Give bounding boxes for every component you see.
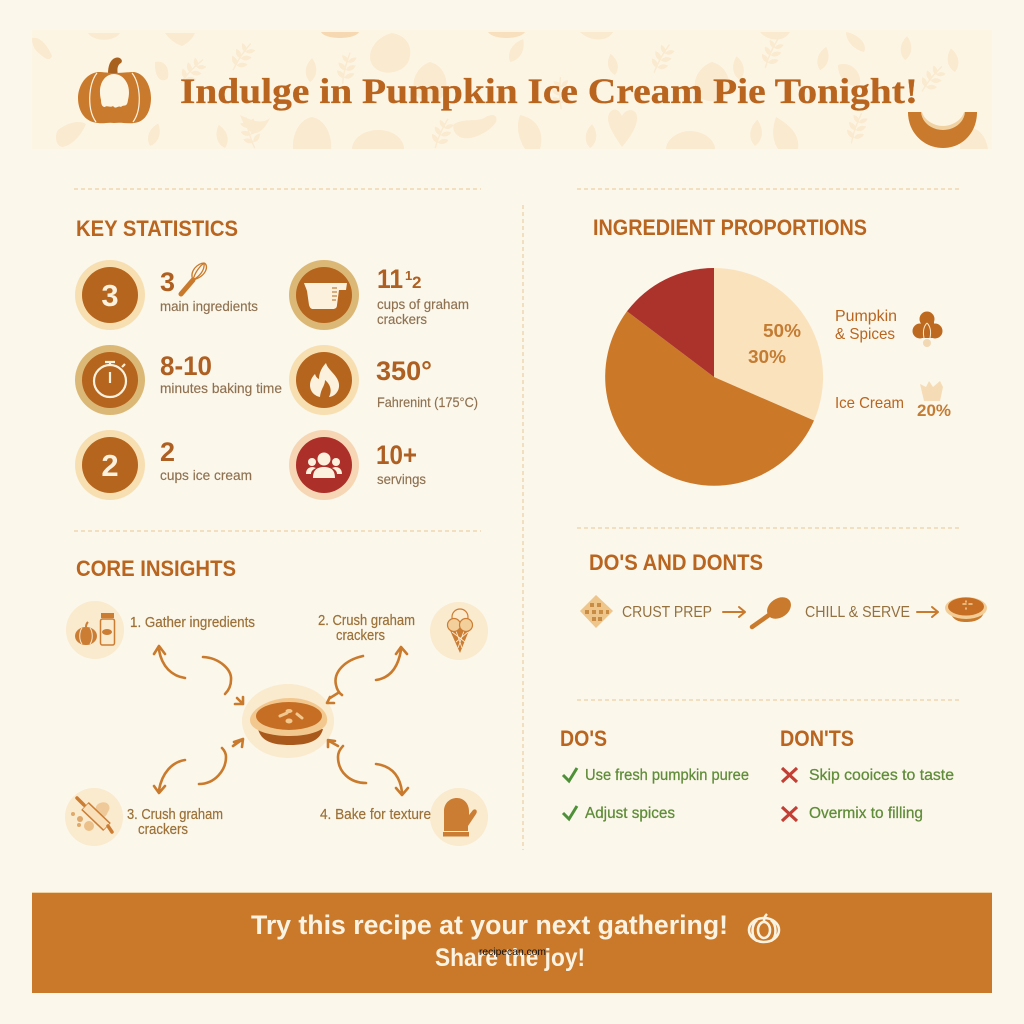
title: Indulge in Pumpkin Ice Cream Pie Tonight! xyxy=(180,71,918,111)
icon: pumpkin and spice jar xyxy=(66,601,124,659)
legend: ice cream xyxy=(835,381,951,420)
icon: rolling pin xyxy=(65,788,123,846)
icon: small pie xyxy=(945,597,987,622)
arrow: crust to spoon xyxy=(723,607,745,617)
label: step 2: crackers xyxy=(336,628,385,644)
footer call to action xyxy=(32,892,992,993)
item: skip cooices to taste: Skip cooices to taste xyxy=(809,767,954,784)
stat: 2 cups ice cream xyxy=(75,430,252,500)
item: overmix to filling: Overmix to filling xyxy=(809,805,923,822)
center pie illustration xyxy=(242,684,334,758)
icon: ice cream cone xyxy=(430,602,488,660)
label: step 1: 1. Gather ingredients xyxy=(130,615,255,631)
label: crust prep: CRUST PREP xyxy=(622,604,712,621)
item: use fresh pumpkin puree: Use fresh pumpkin puree xyxy=(585,767,749,784)
stat: 10+ servings xyxy=(289,430,426,500)
panel: core insights xyxy=(65,556,488,846)
legend: pumpkin and spices xyxy=(835,308,942,347)
stat: 3 main ingredients: 3 xyxy=(160,267,175,297)
stat: 2 cups ice cream: cups ice cream xyxy=(160,467,252,483)
header banner xyxy=(32,30,992,152)
pie chart: 30% xyxy=(748,346,786,367)
stat: 3 main ingredients: 3 xyxy=(101,278,119,313)
stat: 1 1/2 cups of graham crackers: cups of graham xyxy=(377,296,469,312)
stat: 1 1/2 cups of graham crackers: 11 xyxy=(377,264,403,294)
panel: do's list xyxy=(560,726,749,822)
panel: ingredient proportions xyxy=(593,215,951,486)
item: adjust spices: Adjust spices xyxy=(585,805,675,822)
heading: don'ts: DON'TS xyxy=(780,726,854,751)
pie chart xyxy=(605,268,823,486)
legend: pumpkin and spices: & Spices xyxy=(835,326,895,343)
icon: pumpkin with ice cream xyxy=(78,57,151,123)
arrows: step flow xyxy=(154,646,408,795)
panel: key statistics xyxy=(75,216,478,500)
icon: spoon xyxy=(752,593,795,627)
label: step 3 xyxy=(127,807,223,838)
icon: graham cracker xyxy=(580,595,613,628)
heading: do's: DO'S xyxy=(560,726,607,751)
stat: 350 degrees Fahrenheit: 350° xyxy=(376,356,432,386)
stat: 8-10 minutes baking time: minutes baking time xyxy=(160,380,282,396)
heading: core insights: CORE INSIGHTS xyxy=(76,556,236,581)
label: step 2 xyxy=(318,613,415,644)
icon: footer pumpkin xyxy=(749,914,779,942)
stat: 350 degrees Fahrenheit: Fahrenint (175°C) xyxy=(377,394,478,410)
heading: ingredient proportions: INGREDIENT PROPORTIONS xyxy=(593,215,867,240)
stat: 3 main ingredients xyxy=(75,260,258,330)
legend: ice cream: 20% xyxy=(917,401,951,420)
label: chill and serve: CHILL & SERVE xyxy=(805,604,910,621)
panel: do's and donts flow xyxy=(580,550,987,628)
stat: 1 1/2 cups of graham crackers xyxy=(289,260,469,330)
watermark: recipecan.com xyxy=(479,946,546,958)
icon: pumpkin slice bowl xyxy=(908,112,977,148)
label: step 3: crackers xyxy=(138,822,188,838)
label: step 2: 2. Crush graham xyxy=(318,613,415,629)
heading: key statistics: KEY STATISTICS xyxy=(76,216,238,241)
stat: 2 cups ice cream: 2 xyxy=(160,437,175,467)
stat: 1 1/2 cups of graham crackers: 2 xyxy=(412,273,421,292)
stat: 1 1/2 cups of graham crackers: crackers xyxy=(377,311,427,327)
footer call to action: Try this recipe at your next gathering! xyxy=(251,910,728,940)
pie chart: 50% xyxy=(763,320,801,341)
panel: don'ts list xyxy=(780,726,954,822)
stat: 3 main ingredients: main ingredients xyxy=(160,298,258,314)
icon: oven mitt xyxy=(430,788,488,846)
legend: pumpkin and spices: Pumpkin xyxy=(835,308,897,325)
stat: 8-10 minutes baking time xyxy=(75,345,282,415)
stat: 10+ servings: 10+ xyxy=(376,440,417,470)
stat: 8-10 minutes baking time: 8-10 xyxy=(160,351,212,381)
footer call to action: Share the joy! xyxy=(435,944,585,972)
legend: ice cream: Ice Cream xyxy=(835,395,904,412)
heading: do's and donts: DO'S AND DONTS xyxy=(589,550,763,575)
stat: 350 degrees Fahrenheit xyxy=(289,345,478,415)
arrow: chill to pie xyxy=(917,607,938,617)
stat: 10+ servings: servings xyxy=(377,471,426,487)
stat: 2 cups ice cream: 2 xyxy=(101,448,119,483)
stat: 1 1/2 cups of graham crackers: 1 xyxy=(405,268,412,283)
label: step 3: 3. Crush graham xyxy=(127,807,223,823)
label: step 4: 4. Bake for texture xyxy=(320,807,431,823)
